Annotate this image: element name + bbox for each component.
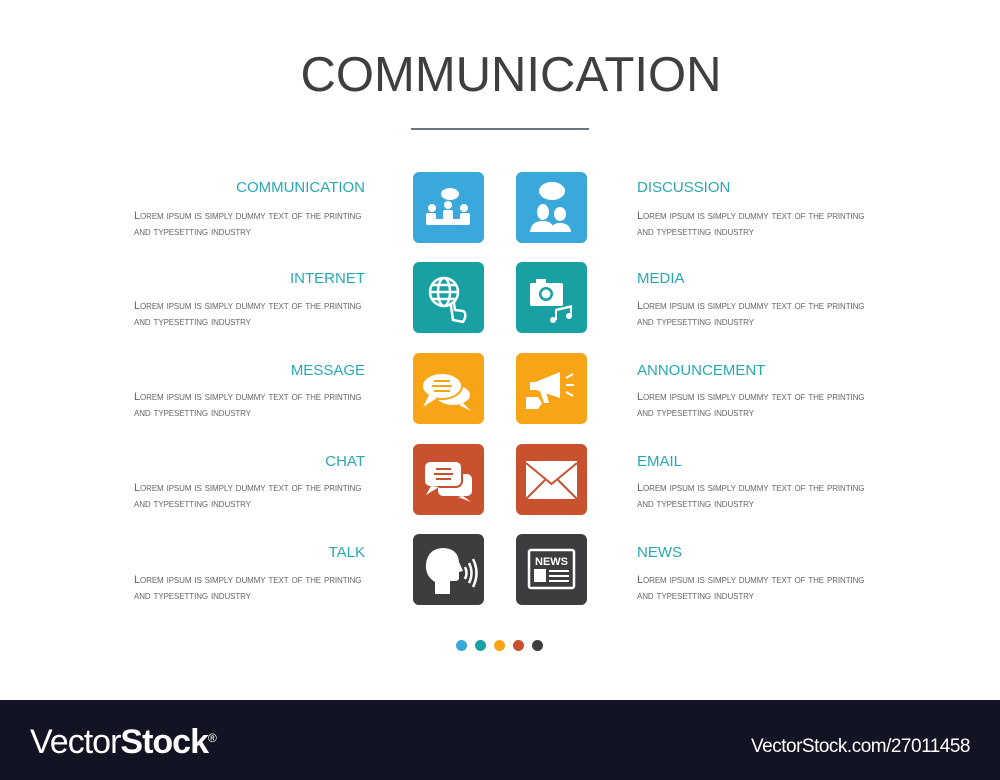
icon: news: NEWS bbox=[535, 556, 568, 568]
left text column: TALK bbox=[329, 544, 365, 561]
right text column: MEDIA bbox=[637, 270, 685, 287]
right text column: and typesetting industry bbox=[637, 407, 754, 419]
left text column: INTERNET bbox=[290, 270, 365, 287]
icon: internet bbox=[413, 262, 484, 333]
icon: media bbox=[516, 262, 587, 333]
right text column: and typesetting industry bbox=[637, 498, 754, 510]
icon: discussion bbox=[516, 172, 587, 243]
right text column: EMAIL bbox=[637, 453, 682, 470]
right text column: Lorem ipsum is simply dummy text of the printing bbox=[637, 574, 864, 586]
left text column: and typesetting industry bbox=[134, 498, 251, 510]
left text column: Lorem ipsum is simply dummy text of the printing bbox=[134, 210, 361, 222]
right text column: and typesetting industry bbox=[637, 590, 754, 602]
icon: chat bbox=[413, 444, 484, 515]
icon: message bbox=[413, 353, 484, 424]
icon: communication bbox=[413, 172, 484, 243]
left text column bbox=[134, 179, 365, 602]
right text column: Lorem ipsum is simply dummy text of the printing bbox=[637, 300, 864, 312]
left text column: MESSAGE bbox=[291, 362, 365, 379]
right text column: Lorem ipsum is simply dummy text of the printing bbox=[637, 391, 864, 403]
left text column: Lorem ipsum is simply dummy text of the printing bbox=[134, 574, 361, 586]
right text column: NEWS bbox=[637, 544, 682, 561]
icon: news bbox=[516, 534, 587, 605]
pagination dots bbox=[456, 640, 543, 651]
footer url: VectorStock.com/27011458 bbox=[751, 736, 970, 757]
right text column: ANNOUNCEMENT bbox=[637, 362, 765, 379]
right text column bbox=[637, 179, 864, 602]
right text column: and typesetting industry bbox=[637, 316, 754, 328]
right text column: and typesetting industry bbox=[637, 226, 754, 238]
icon: talk bbox=[413, 534, 484, 605]
left text column: Lorem ipsum is simply dummy text of the printing bbox=[134, 391, 361, 403]
title: COMMUNICATION bbox=[300, 48, 722, 102]
left text column: and typesetting industry bbox=[134, 590, 251, 602]
right text column: DISCUSSION bbox=[637, 179, 730, 196]
right text column: Lorem ipsum is simply dummy text of the printing bbox=[637, 210, 864, 222]
icon: announcement bbox=[516, 353, 587, 424]
left text column: and typesetting industry bbox=[134, 226, 251, 238]
footer bar bbox=[0, 700, 1000, 780]
left text column: COMMUNICATION bbox=[236, 179, 365, 196]
left text column: Lorem ipsum is simply dummy text of the printing bbox=[134, 482, 361, 494]
footer logo: VectorStock® bbox=[30, 723, 216, 761]
left text column: and typesetting industry bbox=[134, 407, 251, 419]
right text column: Lorem ipsum is simply dummy text of the printing bbox=[637, 482, 864, 494]
left text column: Lorem ipsum is simply dummy text of the printing bbox=[134, 300, 361, 312]
left text column: and typesetting industry bbox=[134, 316, 251, 328]
left text column: CHAT bbox=[325, 453, 365, 470]
icon: email bbox=[516, 444, 587, 515]
